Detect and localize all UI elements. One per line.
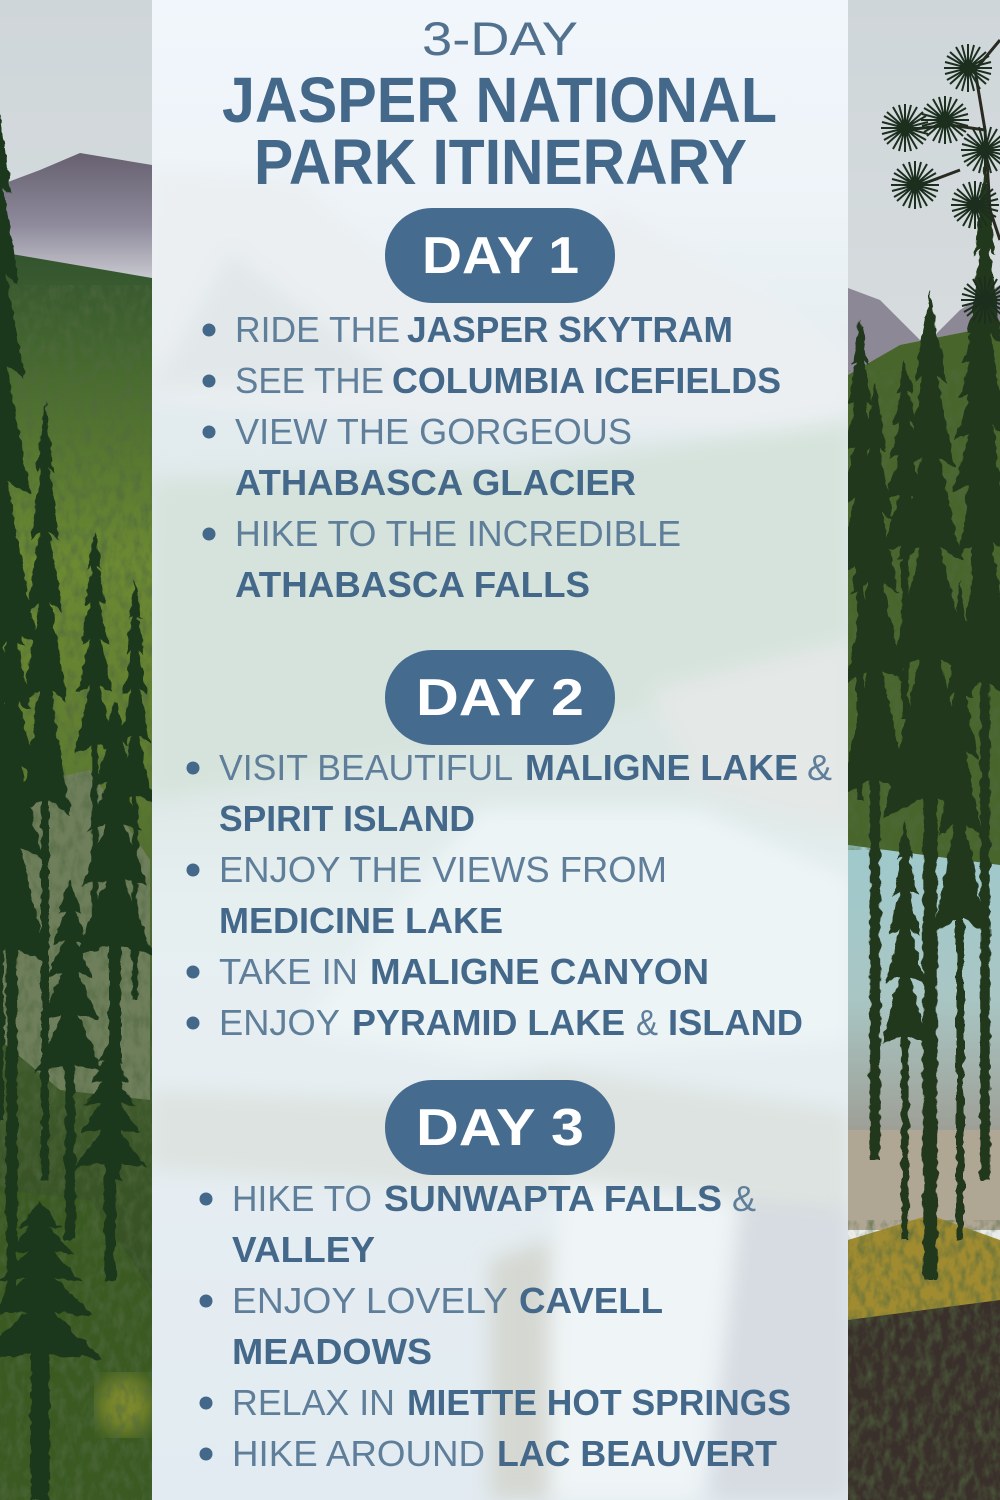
day 1 list: ATHABASCA FALLS [235,564,590,605]
day 1 section [202,208,781,605]
rock [848,1300,1000,1500]
day 2 list: MALIGNE CANYON [370,951,709,992]
faded mountain [344,383,836,422]
day 2 list: ENJOY THE VIEWS FROM [219,849,667,890]
river glimpses left [0,770,150,1100]
title: 3-DAY [422,12,578,65]
day 3 list: MEADOWS [232,1331,432,1372]
moss [848,1215,1000,1320]
day 3 list: SUNWAPTA FALLS [384,1178,722,1219]
day 1 list: RIDE THE [235,309,400,350]
day 1 list: HIKE TO THE INCREDIBLE [235,513,681,554]
day 3 list: VALLEY [232,1229,375,1270]
faded pillar [490,1240,550,1500]
day 1 badge: DAY 1 [422,227,579,285]
day 3 list: HIKE TO [232,1178,372,1219]
day 1 list: COLUMBIA ICEFIELDS [392,360,781,401]
day 3 list: HIKE AROUND [232,1433,485,1474]
day 1 list: ATHABASCA GLACIER [235,462,636,503]
day 2 list [186,747,832,1043]
title: JASPER NATIONAL [222,64,777,136]
day 2 section [186,650,832,1043]
day 2 list: TAKE IN [219,951,358,992]
forest right [848,325,1000,870]
day 2 list: VISIT BEAUTIFUL [219,747,513,788]
day 1 list: VIEW THE GORGEOUS [235,411,632,452]
faded falls [540,1180,740,1500]
faded river [437,811,828,895]
day 3 list: MIETTE HOT SPRINGS [407,1382,791,1423]
day 2 list: & [807,747,832,788]
day 3 badge: DAY 3 [416,1099,584,1157]
pine branch top right [881,40,1000,324]
day 3 list [200,1178,791,1474]
yellow shrub [97,1375,153,1435]
day 3 section [200,1080,791,1474]
faded cliff [710,1200,850,1500]
day 2 list: MALIGNE LAKE [525,747,798,788]
day 2 badge: DAY 2 [416,669,584,727]
day 2 list: ENJOY [219,1002,340,1043]
faded slope [660,659,838,762]
foreground left [0,1251,152,1500]
texture right [848,370,1000,850]
trees left [0,100,154,1500]
texture right lower [848,1220,1000,1500]
title: PARK ITINERARY [254,126,747,198]
texture left [0,285,152,1500]
day 3 list: ENJOY LOVELY [232,1280,508,1321]
faded rocks [150,1070,850,1230]
river right [848,845,1000,1150]
day 3 badge [385,1080,615,1175]
day 3 list: LAC BEAUVERT [497,1433,777,1474]
day 3 list: & [732,1178,756,1219]
day 2 list: SPIRIT ISLAND [219,798,475,839]
day 1 list: SEE THE [235,360,384,401]
day 2 list: MEDICINE LAKE [219,900,503,941]
right mountain [848,285,1000,375]
right bank [848,1130,1000,1230]
day 1 list: JASPER SKYTRAM [407,309,733,350]
day 2 list: ISLAND [668,1002,803,1043]
trees right [837,160,1000,1280]
day 1 list [202,309,781,605]
day 2 list: & [636,1002,658,1043]
faded forest [150,420,850,800]
day 3 list: CAVELL [519,1280,663,1321]
day 1 badge [385,208,615,303]
left mountain [0,153,152,285]
day 2 badge [385,650,615,745]
day 3 list: RELAX IN [232,1382,395,1423]
translucent text panel with faded photo [150,0,850,1500]
day 2 list: PYRAMID LAKE [352,1002,625,1043]
title [222,12,777,198]
forest slope left [0,254,152,1290]
